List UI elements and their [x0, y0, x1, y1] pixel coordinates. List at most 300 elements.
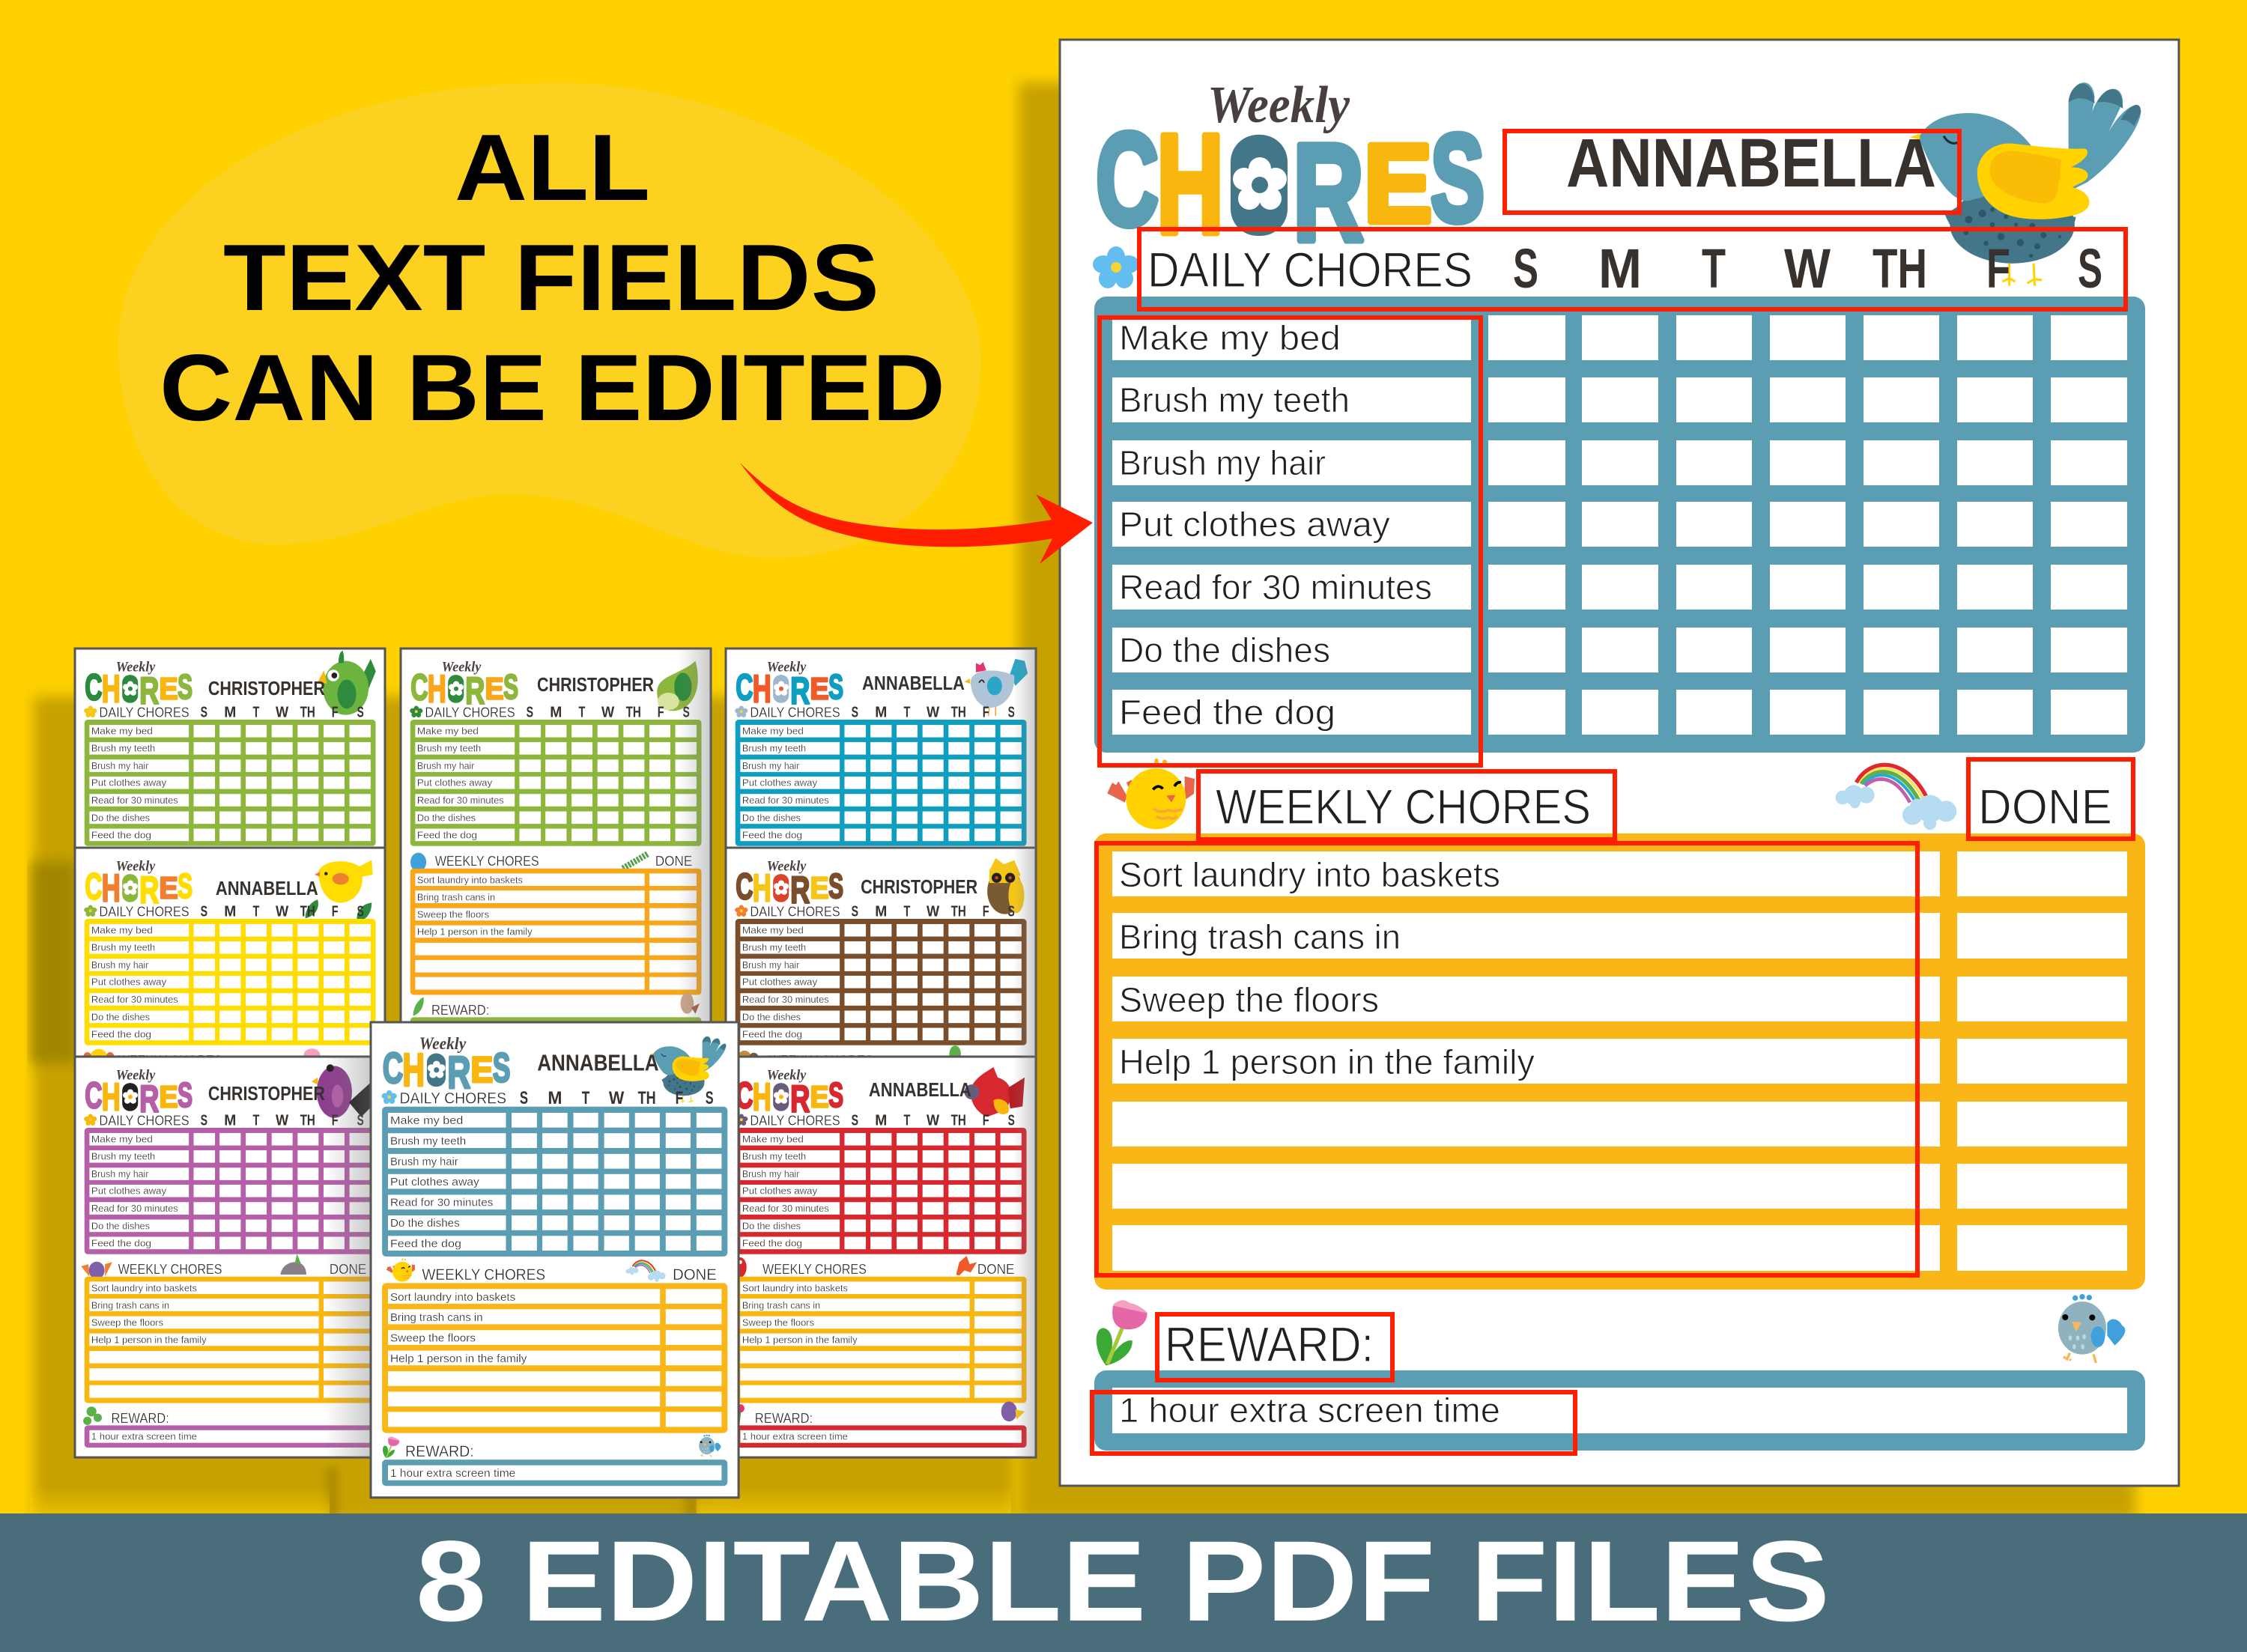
mini sheet: lime Christopher: Make my bed — [417, 726, 479, 737]
mini sheet: front teal Annabella: S — [706, 1088, 714, 1108]
mini sheet: brown Christopher: CHRISTOPHER — [861, 877, 977, 898]
mini sheet: brown Christopher: S — [1008, 903, 1015, 920]
daily chore labels: Brush my hair — [1119, 443, 1326, 482]
title letter O block — [1231, 135, 1288, 236]
title: CHORES: R — [1293, 116, 1364, 270]
mini sheet: brown Christopher: R — [790, 869, 810, 911]
mini sheet: front teal Annabella: REWARD: — [405, 1442, 474, 1460]
mini sheet: brown Christopher: M — [875, 903, 887, 920]
mini sheet: front teal Annabella: Weekly — [419, 1034, 467, 1053]
headline: all text fields can be edited: TEXT FIELDS — [223, 225, 879, 330]
icon: red flower — [736, 1404, 745, 1423]
mini sheet: cyan Annabella: W — [927, 704, 940, 721]
bird: yellow chick — [306, 860, 373, 923]
mini sheet: brown Christopher: DAILY CHORES — [750, 903, 840, 919]
weekly grid cells — [1112, 851, 2127, 1271]
mini sheet: green Christopher: Read for 30 minutes — [91, 795, 178, 806]
mini sheet: lime Christopher: Read for 30 minutes — [417, 795, 504, 806]
mini sheet: cyan Annabella: DAILY CHORES — [750, 704, 840, 720]
mini sheet: purple Christopher: M — [224, 1112, 236, 1129]
panel: reward — [1094, 1370, 2145, 1451]
bird: blue grey hen — [965, 659, 1028, 716]
mini sheet: lime Christopher: Weekly — [442, 659, 482, 675]
icon: purple owl — [81, 1262, 112, 1279]
mini sheet: front teal Annabella: O — [427, 1045, 446, 1093]
mini sheet: green Christopher: F — [332, 704, 339, 721]
mini sheet: front teal Annabella — [371, 1022, 739, 1498]
mini sheet: brown Christopher: Put clothes away — [742, 977, 818, 988]
mini sheet: red Annabella: DONE — [977, 1261, 1014, 1277]
headline: all text fields can be edited — [160, 115, 945, 440]
mini sheet: yellow Annabella: TH — [300, 903, 315, 920]
arrow: red curved arrow to main sheet — [740, 463, 1093, 564]
heading: done: DONE — [1978, 779, 2112, 834]
mini sheet: purple Christopher: Brush my hair — [91, 1168, 149, 1179]
mini sheet: yellow Annabella: DAILY CHORES — [99, 903, 189, 919]
mini sheet: lime Christopher — [401, 649, 711, 1049]
mini sheet: red Annabella: TH — [951, 1112, 966, 1129]
icon: tulip — [1097, 1300, 1148, 1365]
mini sheet: green Christopher: T — [252, 704, 260, 721]
mini sheet: cyan Annabella: S — [852, 704, 858, 721]
mini sheet: brown Christopher: H — [753, 866, 771, 910]
reward text: 1 hour extra screen time — [1119, 1391, 1500, 1430]
mini sheet: purple Christopher: Bring trash cans in — [91, 1299, 169, 1311]
mini sheet: green Christopher: TH — [300, 704, 315, 721]
mini sheet: cyan Annabella: Put clothes away — [742, 777, 818, 789]
mini sheet: yellow Annabella: Weekly — [116, 858, 156, 874]
mini sheet: cyan Annabella — [726, 649, 1036, 1049]
mini sheet: purple Christopher: Do the dishes — [91, 1220, 150, 1231]
mini sheet: purple Christopher: Make my bed — [91, 1134, 153, 1145]
mini sheet: front teal Annabella: E — [470, 1050, 493, 1090]
mini sheet: purple Christopher: Brush my teeth — [91, 1151, 155, 1162]
mini sheet: red Annabella: Bring trash cans in — [742, 1299, 820, 1311]
headline: all text fields can be edited: CAN BE EDITED — [160, 335, 945, 440]
mini sheet: red Annabella: Sort laundry into baskets — [742, 1282, 848, 1293]
mini sheet: yellow Annabella: Put clothes away — [91, 977, 167, 988]
mini sheet: brown Christopher: E — [810, 870, 829, 905]
mini sheet: red Annabella: F — [983, 1112, 989, 1129]
mini sheet: purple Christopher: C — [85, 1075, 103, 1116]
mini sheet: front teal Annabella: Feed the dog — [390, 1237, 461, 1250]
mini sheet: cyan Annabella: S — [1008, 704, 1015, 721]
icons: weekly chores row tops — [738, 1045, 961, 1064]
mini sheet: yellow Annabella: M — [224, 903, 236, 920]
mini sheet: purple Christopher — [75, 1057, 385, 1457]
mini sheet: red Annabella: Read for 30 minutes — [742, 1203, 829, 1214]
mini sheet: cyan Annabella: Make my bed — [742, 726, 804, 737]
mini sheet: green Christopher: Weekly — [116, 659, 156, 675]
mini sheet: red Annabella: S — [1008, 1112, 1015, 1129]
mini sheet: lime Christopher: Help 1 person in the family — [417, 926, 533, 938]
mini sheet: red Annabella: ANNABELLA — [869, 1080, 971, 1101]
mini sheet: cyan Annabella: ANNABELLA — [862, 673, 965, 694]
mini sheet: cyan Annabella: O — [773, 668, 789, 708]
mini sheet: lime Christopher: O — [448, 668, 464, 708]
mini sheet: red Annabella: 1 hour extra screen time — [742, 1431, 848, 1442]
bird: red parrot — [964, 1067, 1025, 1117]
icon: blue bird — [410, 853, 426, 877]
red editable-field outlines — [1092, 131, 2133, 1454]
mini sheet: brown Christopher: Brush my teeth — [742, 942, 806, 953]
mini sheet: red Annabella: E — [810, 1079, 829, 1114]
mini sheet: cyan Annabella: Weekly — [767, 659, 807, 675]
mini sheet: brown Christopher: WEEKLY CHORES — [769, 1052, 873, 1068]
bird: lime bird — [657, 661, 698, 711]
mini sheet: brown Christopher: F — [983, 903, 989, 920]
mini sheet: front teal Annabella: F — [676, 1088, 683, 1108]
mini sheet: green Christopher: H — [102, 667, 121, 711]
icon: maple leaf — [956, 1256, 977, 1275]
mini sheet: cyan Annabella: Feed the dog — [742, 829, 802, 840]
mini sheet: cyan Annabella: Do the dishes — [742, 812, 801, 823]
bird: brown owl — [987, 858, 1024, 914]
mini sheet: front teal Annabella: Make my bed — [390, 1114, 463, 1127]
icon: clover — [83, 1406, 102, 1425]
mini sheet: front teal Annabella: T — [582, 1088, 589, 1108]
mini sheet: red Annabella: WEEKLY CHORES — [762, 1261, 867, 1277]
mini sheet: purple Christopher: Weekly — [116, 1067, 156, 1083]
mini sheet: brown Christopher: Weekly — [767, 858, 807, 874]
mini sheet: red Annabella: H — [753, 1075, 771, 1119]
mini sheet: purple Christopher: S — [201, 1112, 207, 1129]
headline: all text fields can be edited: ALL — [455, 115, 650, 220]
title: CHORES: E — [1364, 122, 1432, 246]
mini sheet: red Annabella: T — [903, 1112, 911, 1129]
bird: green parrot — [318, 651, 376, 715]
mini sheet: front teal Annabella: M — [548, 1088, 562, 1108]
mini sheet: lime Christopher: CHRISTOPHER — [537, 675, 654, 696]
mini sheet: green Christopher: S — [357, 704, 364, 721]
daily grid cells — [1112, 315, 2127, 735]
mini sheet: brown Christopher: C — [736, 866, 753, 907]
weekday headers: F — [1986, 237, 2010, 300]
mini sheet: front teal Annabella: Brush my teeth — [390, 1135, 466, 1147]
weekly chore labels: Bring trash cans in — [1119, 917, 1401, 956]
mini sheet: front teal Annabella: Sweep the floors — [390, 1332, 476, 1345]
mini sheet: yellow Annabella: ANNABELLA — [216, 878, 318, 899]
mini sheet: yellow Annabella: W — [276, 903, 289, 920]
mini sheet: purple Christopher: R — [139, 1078, 160, 1120]
title: CHORES: O — [1231, 112, 1288, 255]
mini sheet: lime Christopher: Sweep the floors — [417, 909, 489, 920]
daily chore labels: Feed the dog — [1119, 693, 1335, 732]
mini sheet: lime Christopher: DONE — [655, 853, 692, 869]
mini sheet: cyan Annabella: M — [875, 704, 887, 721]
mini sheet: red Annabella: S — [852, 1112, 858, 1129]
mini sheet: red Annabella: Make my bed — [742, 1134, 804, 1145]
icon: title flower — [1233, 157, 1287, 210]
weekly chore labels: Sweep the floors — [1119, 980, 1379, 1019]
icon: small blue bird — [2058, 1294, 2125, 1363]
icon: rainbow with clouds — [1836, 765, 1956, 830]
mini sheet: purple Christopher: T — [252, 1112, 260, 1129]
mini sheet: green Christopher: Feed the dog — [91, 829, 151, 840]
mini sheet: green Christopher: CHRISTOPHER — [208, 678, 325, 699]
mini sheet: lime Christopher: REWARD: — [431, 1002, 489, 1018]
mini sheet: brown Christopher: Make my bed — [742, 925, 804, 936]
mini sheet: red Annabella: Sweep the floors — [742, 1317, 814, 1328]
mini sheet: green Christopher: Put clothes away — [91, 777, 167, 789]
icon: yellow chick — [1107, 759, 1195, 829]
mini sheet: green Christopher: S — [178, 667, 192, 706]
mini sheet: green Christopher: Brush my hair — [91, 760, 149, 771]
mini sheet: green Christopher: DAILY CHORES — [99, 704, 189, 720]
mini sheet: red Annabella: O — [773, 1076, 789, 1116]
mini sheet: red Annabella: Help 1 person in the family — [742, 1334, 858, 1346]
mini sheet: front teal Annabella: Bring trash cans in — [390, 1311, 483, 1324]
mini sheet: yellow Annabella — [75, 848, 385, 1248]
mini sheet: front teal Annabella: S — [520, 1088, 528, 1108]
mini sheet: lime Christopher: Bring trash cans in — [417, 891, 495, 902]
mini sheet: brown Christopher — [726, 848, 1036, 1248]
mini sheet: lime Christopher: W — [601, 704, 615, 721]
icon: rock — [280, 1254, 306, 1275]
mini sheet: brown Christopher: Read for 30 minutes — [742, 994, 829, 1005]
mini sheet: purple Christopher: E — [160, 1079, 178, 1114]
mini sheet: cyan Annabella: C — [736, 667, 753, 708]
mini sheet: red Annabella: M — [875, 1112, 887, 1129]
mini sheet: purple Christopher: DAILY CHORES — [99, 1112, 189, 1128]
icon: green leaf — [413, 997, 424, 1015]
mini sheet: brown Christopher: TH — [951, 903, 966, 920]
mini sheet: front teal Annabella: W — [609, 1088, 624, 1108]
title: CHORES: C — [1096, 106, 1159, 253]
mini sheet: lime Christopher: C — [410, 667, 428, 708]
mini sheet: yellow Annabella: S — [357, 903, 364, 920]
daily chore labels: Make my bed — [1119, 318, 1341, 357]
panel: weekly chores grid — [1094, 833, 2145, 1290]
mini sheet: red Annabella — [726, 1057, 1036, 1457]
mini sheet: green Christopher — [75, 649, 385, 1049]
mini sheet: green Christopher: E — [160, 671, 178, 705]
mini sheet: lime Christopher: M — [550, 704, 562, 721]
mini sheet: green Christopher: W — [276, 704, 289, 721]
child name: ANNABELLA — [1566, 125, 1936, 201]
mini sheet: purple Christopher: Help 1 person in the family — [91, 1334, 207, 1346]
bird: teal bird with yellow wing — [1910, 82, 2141, 286]
daily chore labels: Do the dishes — [1119, 631, 1330, 669]
mini sheet: front teal Annabella: TH — [638, 1088, 656, 1108]
heading: daily chores: DAILY CHORES — [1147, 242, 1473, 297]
icon: green sprig — [622, 854, 648, 869]
speech blob behind headline — [118, 83, 981, 558]
mini sheet: green Christopher: R — [139, 669, 160, 712]
mini sheet: front teal Annabella: Read for 30 minutes — [390, 1197, 494, 1209]
mini sheet: purple Christopher: H — [102, 1075, 121, 1119]
icon: blue flower — [1093, 246, 1139, 288]
daily chore labels — [1119, 318, 1432, 732]
weekly chore labels — [1119, 855, 1535, 1081]
mini sheet: lime Christopher: Sort laundry into baskets — [417, 874, 523, 885]
mini sheet: brown Christopher: O — [773, 867, 789, 907]
weekday headers: TH — [1872, 237, 1927, 300]
mini sheet: yellow Annabella: S — [201, 903, 207, 920]
mini sheet: front teal Annabella: WEEKLY CHORES — [422, 1265, 545, 1284]
mini sheet: front teal Annabella: Brush my hair — [390, 1156, 458, 1168]
weekday headers: T — [1702, 237, 1726, 300]
mini sheet: yellow Annabella: C — [85, 866, 103, 907]
panel: daily chores grid — [1094, 297, 2145, 753]
mini sheet: purple Christopher: DONE — [330, 1261, 366, 1277]
mini sheet: yellow Annabella: O — [122, 867, 138, 907]
mini sheet: red Annabella: DAILY CHORES — [750, 1112, 840, 1128]
mini sheet: front teal Annabella: DAILY CHORES — [399, 1088, 506, 1107]
mini sheet: purple Christopher: CHRISTOPHER — [208, 1084, 325, 1105]
mini sheet: red Annabella: W — [927, 1112, 940, 1129]
weekday headers: S — [2078, 237, 2102, 300]
weekly chore labels: Help 1 person in the family — [1119, 1042, 1535, 1081]
mini sheet: green Christopher: Brush my teeth — [91, 743, 155, 754]
mini sheet: lime Christopher: TH — [626, 704, 641, 721]
mini sheet: purple Christopher: Read for 30 minutes — [91, 1203, 178, 1214]
mini sheet: cyan Annabella: T — [903, 704, 911, 721]
mini sheet: yellow Annabella: Brush my teeth — [91, 942, 155, 953]
mini sheet: lime Christopher: E — [485, 671, 504, 705]
mini sheet: front teal Annabella: Put clothes away — [390, 1176, 479, 1188]
mini sheet: brown Christopher: Brush my hair — [742, 959, 800, 971]
mini sheet: red Annabella: C — [736, 1075, 753, 1116]
mini sheet: brown Christopher: S — [828, 866, 843, 905]
mini sheet: lime Christopher: Do the dishes — [417, 812, 476, 823]
mini sheet: lime Christopher: DAILY CHORES — [425, 704, 515, 720]
mini sheet: lime Christopher: F — [658, 704, 664, 721]
mini sheet: front teal Annabella: ANNABELLA — [537, 1051, 659, 1075]
mini sheet: cyan Annabella: Read for 30 minutes — [742, 795, 829, 806]
title: CHORES: H — [1156, 106, 1224, 264]
icons: weekly chores row tops — [83, 1048, 321, 1066]
daily chore labels: Brush my teeth — [1119, 380, 1350, 419]
mini sheet: brown Christopher: Do the dishes — [742, 1011, 801, 1022]
mini sheet: purple Christopher: Feed the dog — [91, 1237, 151, 1248]
mini sheet: cyan Annabella: H — [753, 667, 771, 711]
mini sheet: yellow Annabella: Read for 30 minutes — [91, 994, 178, 1005]
mini sheet: green Christopher: C — [85, 667, 103, 708]
daily chore labels: Put clothes away — [1119, 505, 1390, 544]
mini sheet: purple Christopher: 1 hour extra screen time — [91, 1431, 197, 1442]
icon: brown bird — [681, 993, 700, 1014]
mini sheet: front teal Annabella: 1 hour extra screen time — [390, 1467, 515, 1480]
mini sheet: green Christopher: Do the dishes — [91, 812, 150, 823]
mini sheet: lime Christopher: S — [683, 704, 690, 721]
mini sheet: lime Christopher: S — [503, 667, 518, 706]
title: CHORES: S — [1431, 109, 1485, 248]
mini sheet: lime Christopher: T — [578, 704, 586, 721]
bird: purple bird — [312, 1064, 372, 1118]
mini sheet: yellow Annabella: Feed the dog — [91, 1028, 151, 1039]
mini sheet: lime Christopher: H — [428, 667, 446, 711]
mini sheet: cyan Annabella: TH — [951, 704, 966, 721]
mini sheet: brown Christopher: S — [852, 903, 858, 920]
mini sheet: brown Christopher: Feed the dog — [742, 1028, 802, 1039]
mini sheet: red Annabella: R — [790, 1078, 810, 1120]
mini sheet: front teal Annabella: C — [383, 1045, 403, 1093]
mini sheet: lime Christopher: Brush my hair — [417, 760, 475, 771]
mini sheet: red Annabella: Brush my hair — [742, 1168, 800, 1179]
icon: red bird — [734, 1257, 747, 1278]
mini sheet: lime Christopher: Put clothes away — [417, 777, 493, 789]
banner text: 8 EDITABLE PDF FILES — [416, 1517, 1830, 1645]
mini sheet: purple Christopher: W — [276, 1112, 289, 1129]
mini sheet: front teal Annabella: Help 1 person in the family — [390, 1352, 527, 1365]
mini sheet: front teal Annabella: Do the dishes — [390, 1217, 460, 1230]
mini sheet: cyan Annabella: Brush my hair — [742, 760, 800, 771]
mini sheet: purple Christopher: S — [357, 1112, 364, 1129]
mini sheet: cyan Annabella: E — [810, 671, 829, 705]
title script: Weekly: Weekly — [1207, 76, 1350, 134]
mini sheet: red Annabella: Do the dishes — [742, 1220, 801, 1231]
mini sheet: lime Christopher: R — [465, 669, 485, 712]
mini sheet: yellow Annabella: Make my bed — [91, 925, 153, 936]
heading: weekly chores: WEEKLY CHORES — [1216, 779, 1591, 834]
mini sheet: yellow Annabella: T — [252, 903, 260, 920]
mini sheet: front teal Annabella: H — [402, 1045, 425, 1096]
mini sheet: purple Christopher: O — [122, 1076, 138, 1116]
weekday headers: W — [1784, 237, 1831, 300]
weekly chore labels: Sort laundry into baskets — [1119, 855, 1500, 894]
mini sheet: lime Christopher: Brush my teeth — [417, 743, 481, 754]
mini sheet: yellow Annabella: R — [139, 869, 160, 911]
daily chore labels: Read for 30 minutes — [1119, 568, 1432, 607]
mini sheet: lime Christopher: S — [527, 704, 533, 721]
mini sheet: red Annabella: REWARD: — [755, 1410, 813, 1426]
mini sheet: red Annabella: Put clothes away — [742, 1185, 818, 1197]
mini sheet: brown Christopher: T — [903, 903, 911, 920]
mini sheet: lime Christopher: Feed the dog — [417, 829, 477, 840]
bird: teal bird with yellow wing — [650, 1036, 726, 1103]
mini sheet: cyan Annabella: F — [983, 704, 989, 721]
mini sheet: brown Christopher: W — [927, 903, 940, 920]
mini sheet: yellow Annabella: H — [102, 866, 121, 910]
mini sheet: green Christopher: O — [122, 668, 138, 708]
reward field — [1112, 1388, 2127, 1433]
mini sheet: red Annabella: Weekly — [767, 1067, 807, 1083]
mini sheet: cyan Annabella: Brush my teeth — [742, 743, 806, 754]
mini sheet: yellow Annabella: S — [178, 866, 192, 905]
mini sheet: purple Christopher: WEEKLY CHORES — [118, 1261, 222, 1277]
mini sheet: purple Christopher: TH — [300, 1112, 315, 1129]
mini sheet: yellow Annabella: F — [332, 903, 339, 920]
mini sheet: purple Christopher: Sweep the floors — [91, 1317, 163, 1328]
mini sheet: purple Christopher: F — [332, 1112, 339, 1129]
mini sheet: green Christopher: M — [224, 704, 236, 721]
mini sheet: cyan Annabella: R — [790, 669, 810, 712]
large main sheet — [1060, 40, 2179, 1486]
mini sheet: purple Christopher: Sort laundry into baskets — [91, 1282, 197, 1293]
mini sheet: front teal Annabella: Sort laundry into baskets — [390, 1291, 516, 1304]
mini sheet: yellow Annabella: Brush my hair — [91, 959, 149, 971]
heading: reward: REWARD: — [1165, 1317, 1374, 1372]
weekday headers: S — [1513, 237, 1538, 300]
mini sheet: yellow Annabella: Do the dishes — [91, 1011, 150, 1022]
mini sheet: front teal Annabella: S — [493, 1045, 510, 1091]
mini sheet: yellow Annabella: E — [160, 870, 178, 905]
mini sheet: purple Christopher: Put clothes away — [91, 1185, 167, 1197]
mini sheet: front teal Annabella: R — [447, 1047, 470, 1098]
mini sheet: purple Christopher: REWARD: — [111, 1410, 169, 1426]
mini sheet: green Christopher: Make my bed — [91, 726, 153, 737]
banner: footer bar — [0, 1513, 2247, 1652]
sheet paper — [1060, 40, 2179, 1486]
mini sheet: lime Christopher: WEEKLY CHORES — [435, 853, 539, 869]
mini sheet: red Annabella: Brush my teeth — [742, 1151, 806, 1162]
mini sheet: front teal Annabella: DONE — [673, 1265, 717, 1284]
mini sheet: purple Christopher: S — [178, 1075, 192, 1114]
mini sheet: red Annabella: Feed the dog — [742, 1237, 802, 1248]
icon: purple bird — [1001, 1402, 1025, 1421]
mini sheet: yellow Annabella: WEEKLY CHORES — [118, 1052, 222, 1068]
